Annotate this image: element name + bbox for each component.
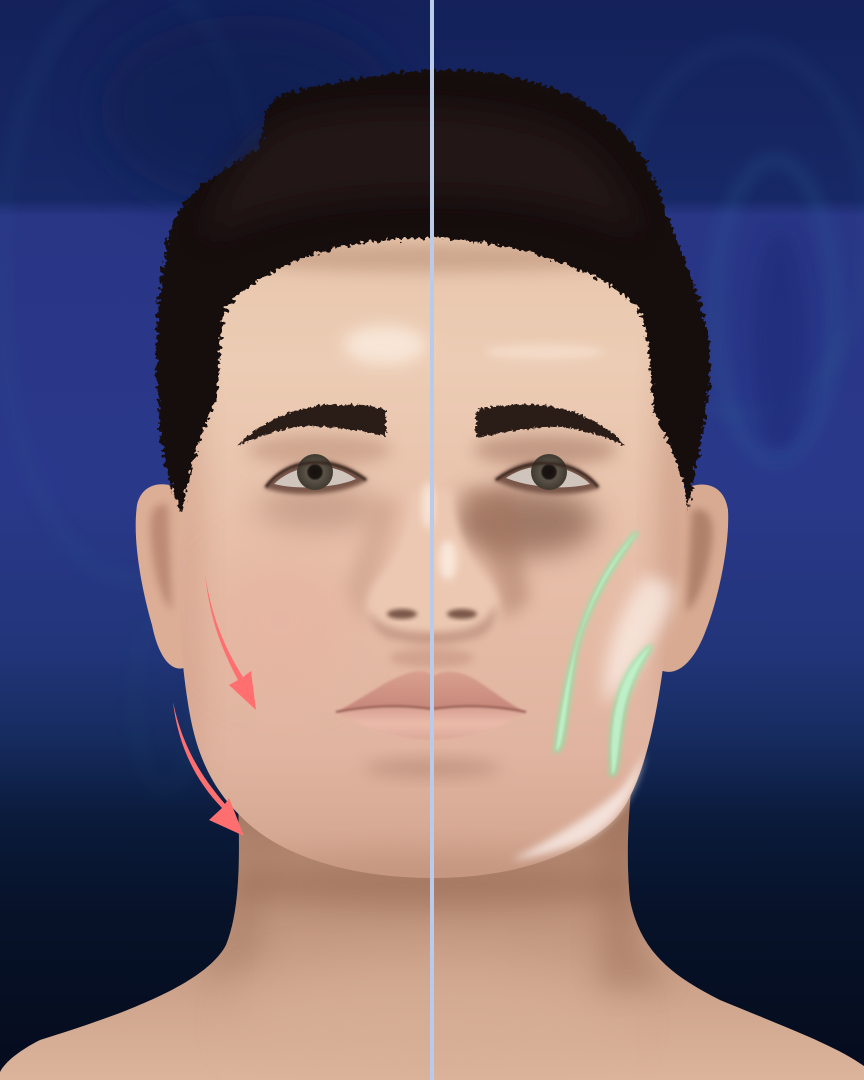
left ear bbox=[136, 484, 184, 669]
under-eye shadows bbox=[256, 486, 380, 530]
right eyebrow bbox=[476, 405, 625, 446]
left eyebrow bbox=[238, 405, 386, 446]
jaw highlights on right bbox=[512, 575, 673, 860]
background glow rings bbox=[0, 0, 864, 790]
chin shadow under lip bbox=[364, 758, 500, 778]
face bbox=[182, 236, 684, 878]
eye socket shadows bbox=[248, 434, 392, 466]
right eye bbox=[494, 454, 600, 494]
hair bbox=[157, 70, 710, 512]
red arrow: cheek bbox=[205, 574, 256, 710]
left eye bbox=[264, 454, 368, 494]
nose side shadow bbox=[462, 490, 530, 620]
under-chin shadow bbox=[227, 863, 637, 907]
right ear bbox=[660, 485, 728, 672]
lips bbox=[336, 671, 526, 740]
nose bbox=[367, 481, 499, 644]
green lift streaks bbox=[556, 532, 651, 774]
face shading bbox=[168, 244, 694, 892]
red arrow: jaw bbox=[173, 702, 244, 836]
center divider line bbox=[430, 0, 434, 1080]
philtrum shadow bbox=[390, 648, 474, 668]
hair highlights bbox=[205, 107, 640, 240]
neck side shadow bbox=[209, 888, 262, 975]
neck centre light bbox=[242, 960, 622, 1080]
forehead shine bbox=[343, 325, 427, 365]
neck and shoulders bbox=[0, 780, 864, 1080]
